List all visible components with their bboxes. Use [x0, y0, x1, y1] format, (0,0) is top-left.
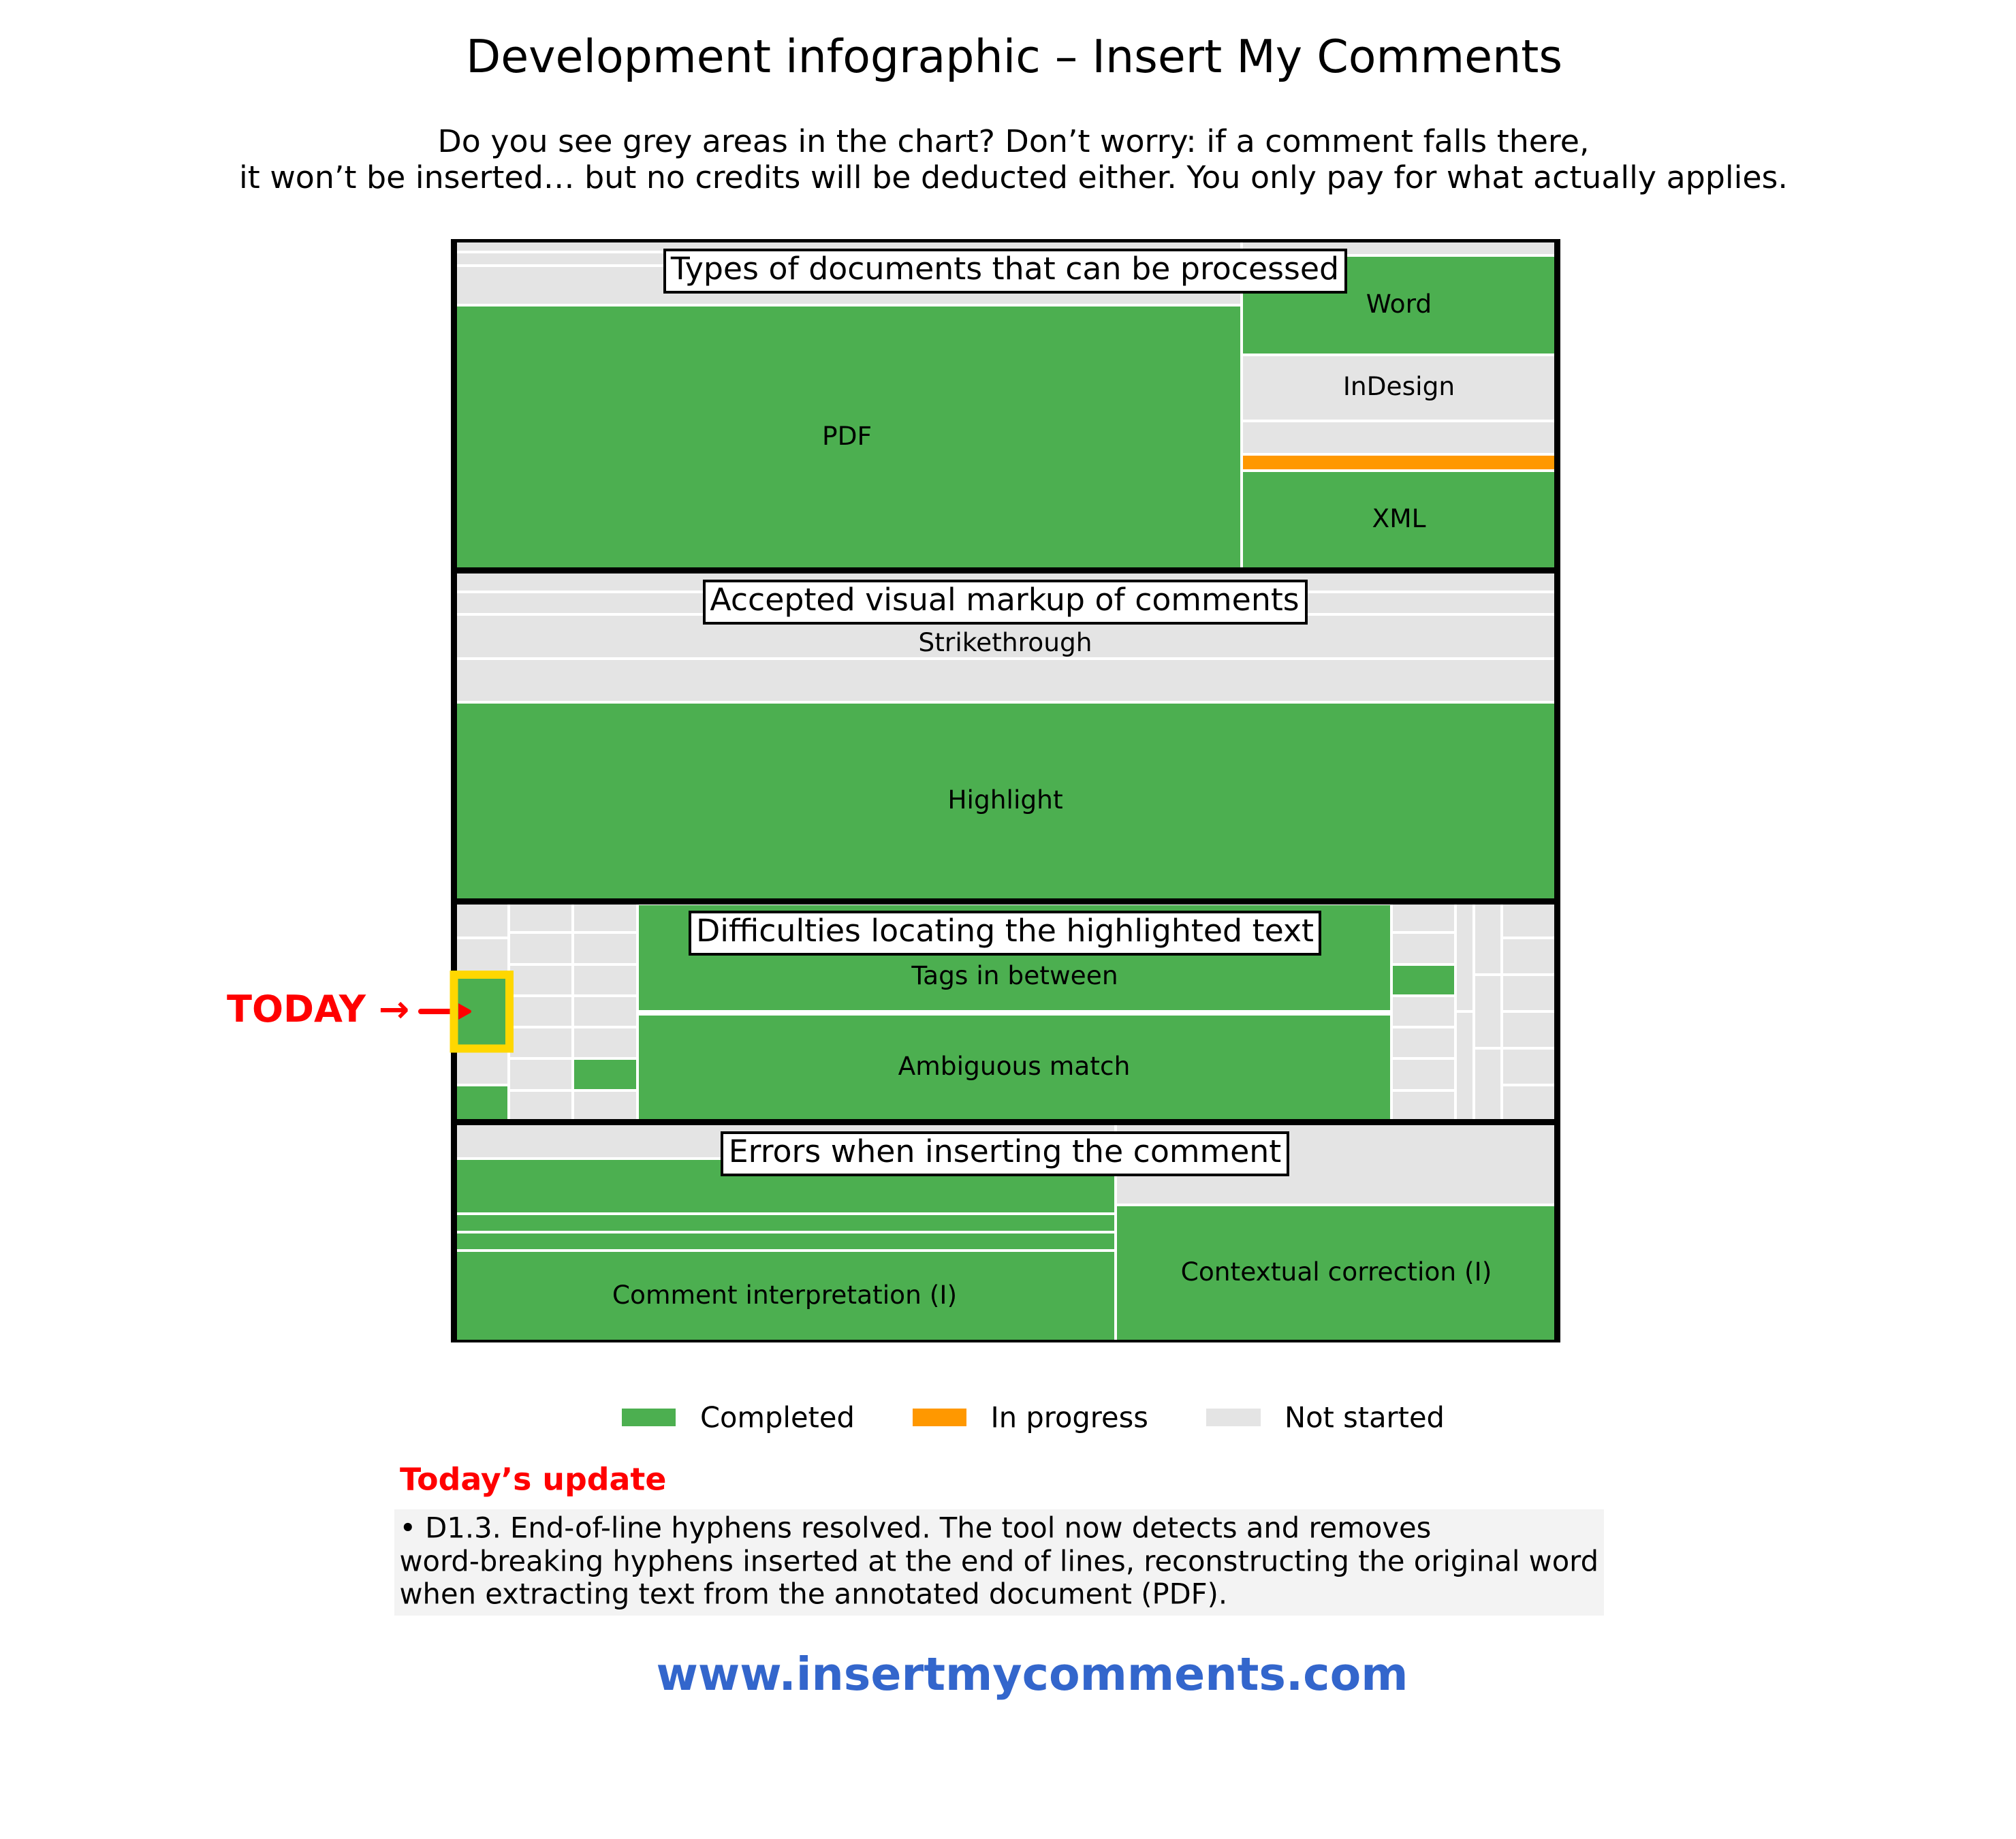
update text panel: when extracting text from the annotated document (PDF). [399, 1577, 1227, 1610]
panel: difficulties locating [457, 905, 1554, 1119]
update heading: Today’s update [400, 1460, 666, 1497]
section heading: accepted visual markup: Accepted visual markup of comments [710, 581, 1300, 618]
cell: InDesign [1243, 356, 1554, 420]
panel: types of documents [457, 242, 1554, 567]
cell: PDF: PDF [822, 421, 872, 451]
update text panel [394, 1509, 1604, 1616]
legend item: not started: Not started [1285, 1400, 1445, 1434]
cell: Comment interpretation: Comment interpretation (I) [612, 1280, 957, 1310]
treemap chart [451, 239, 1560, 1342]
cell: Tags in between: Tags in between [911, 960, 1118, 990]
cell: Tags in between [639, 905, 1390, 1010]
cell: Strikethrough [457, 616, 1554, 657]
cell: XML: XML [1372, 503, 1426, 533]
today highlight box [454, 975, 509, 1049]
legend [622, 1400, 1445, 1434]
legend item: in progress: In progress [990, 1400, 1148, 1434]
section heading: difficulties locating: Difficulties locating the highlighted text [696, 912, 1314, 949]
cell: Contextual correction [1117, 1206, 1554, 1340]
cell: Word [1243, 257, 1554, 353]
cell: Word: Word [1366, 289, 1432, 319]
panel: errors when inserting [457, 1125, 1554, 1340]
legend item: not started [1206, 1400, 1445, 1434]
subtitle: Do you see grey areas in the chart? Don’t worry: if a comment falls there, [437, 123, 1590, 159]
update text panel: • D1.3. End-of-line hyphens resolved. The tool now detects and removes [399, 1511, 1431, 1545]
update text panel: word-breaking hyphens inserted at the end of lines, reconstructing the original word [399, 1545, 1598, 1577]
cell: Highlight: Highlight [947, 785, 1063, 815]
cell: InDesign: InDesign [1343, 371, 1455, 401]
cell: XML [1243, 472, 1554, 567]
cell: Contextual correction: Contextual correction (I) [1181, 1257, 1492, 1287]
cell: Ambiguous match [639, 1016, 1390, 1119]
cell: Highlight [457, 704, 1554, 898]
legend item: in progress [913, 1400, 1148, 1434]
cell: Strikethrough: Strikethrough [918, 627, 1092, 657]
cell: Ambiguous match: Ambiguous match [898, 1051, 1130, 1081]
today arrow shaft [421, 1009, 455, 1014]
website url: www.insertmycomments.com [656, 1648, 1408, 1701]
subtitle: it won’t be inserted… but no credits will be deducted either. You only pay for what actually applies. [239, 159, 1788, 195]
chart frame [451, 239, 1560, 1342]
title: Development infographic – Insert My Comments [466, 30, 1562, 83]
legend item: completed [622, 1400, 855, 1434]
today arrow head [458, 1003, 471, 1020]
legend item: completed: Completed [700, 1400, 855, 1434]
cell: PDF [457, 306, 1240, 567]
panel: accepted visual markup [457, 573, 1554, 898]
subtitle [239, 123, 1788, 195]
today label: TODAY → [227, 988, 409, 1031]
section heading: errors when inserting: Errors when inserting the comment [729, 1133, 1281, 1169]
section heading: types of documents: Types of documents that can be processed [670, 250, 1339, 287]
cell: Comment interpretation [457, 1252, 1114, 1340]
